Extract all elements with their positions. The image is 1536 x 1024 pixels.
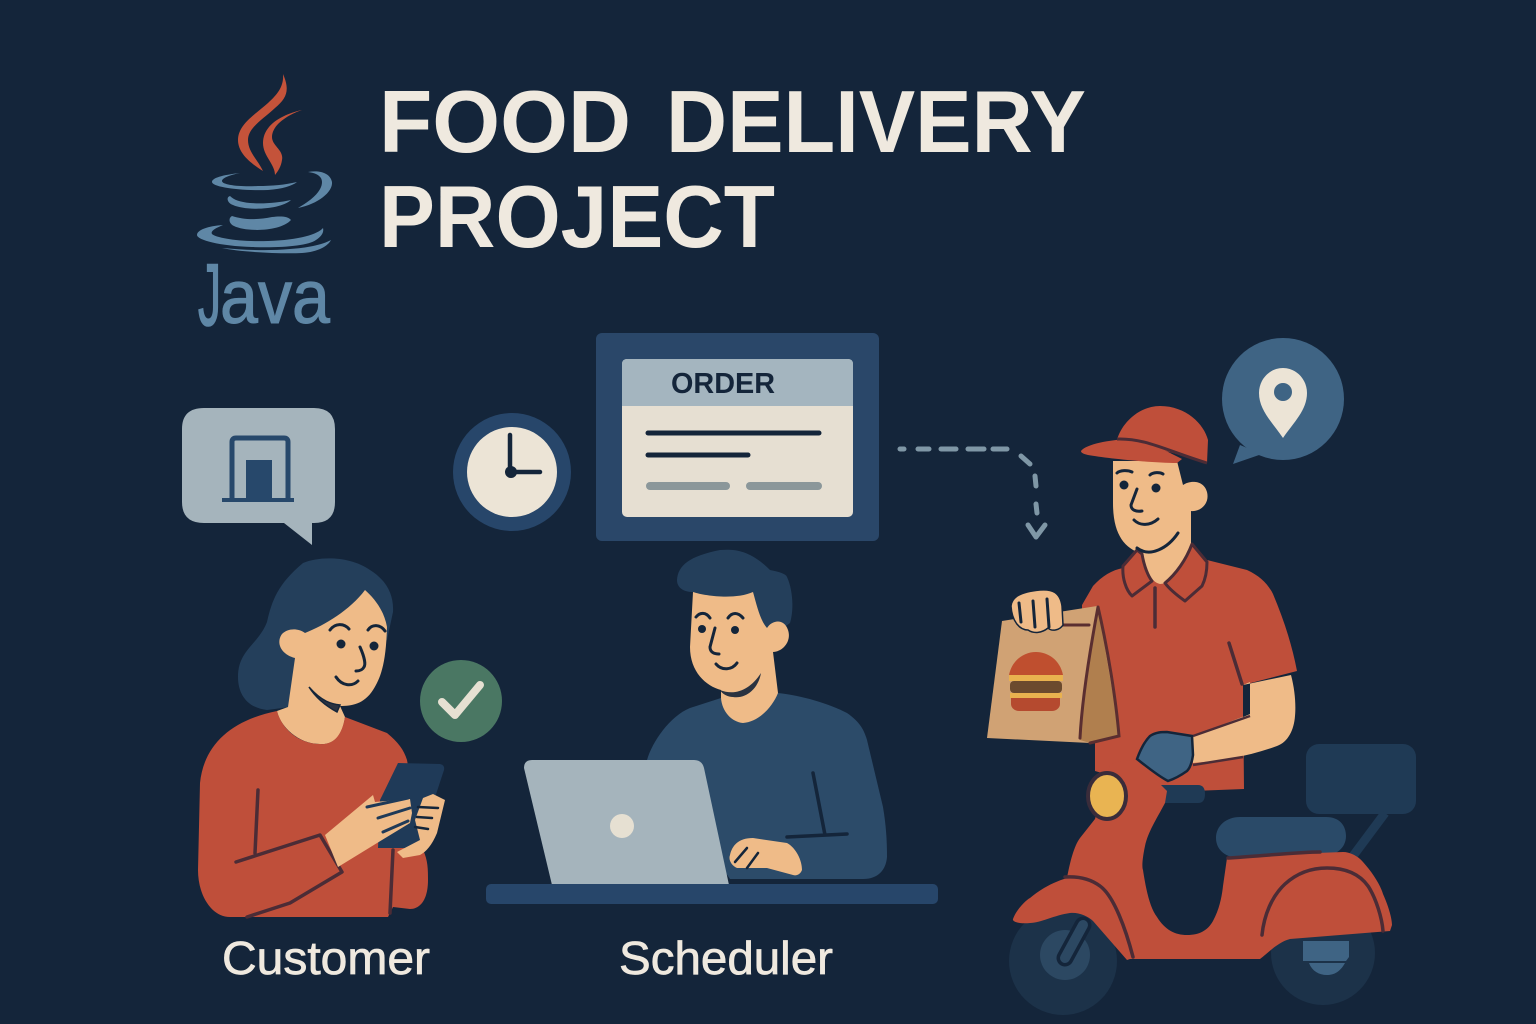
left hand (325, 795, 412, 867)
chin shadow (720, 673, 761, 697)
title: PROJECT (379, 167, 775, 266)
title: FOOD (379, 72, 631, 171)
hair (677, 550, 792, 640)
icon: green check (420, 660, 502, 742)
shirt (1082, 560, 1297, 792)
right hand (397, 794, 445, 858)
order text lines (648, 433, 819, 486)
neck and face (690, 592, 789, 723)
title (379, 72, 1086, 266)
panel: order card (596, 333, 879, 541)
face (330, 625, 385, 685)
handlebar (1160, 785, 1205, 803)
sweater lines (236, 790, 393, 917)
label: scheduler: Scheduler (619, 932, 833, 984)
holding hand (1011, 590, 1063, 632)
scooter rear box (1306, 744, 1416, 814)
neck and face (277, 590, 387, 744)
icon: Java logo: J (198, 245, 221, 344)
sleeve gap arm (1193, 675, 1295, 763)
desk (486, 884, 938, 904)
icon: location bubble (1222, 338, 1344, 464)
icon: Java logo (197, 74, 332, 344)
face (1117, 471, 1178, 552)
phone (378, 763, 444, 848)
scooter body (1013, 760, 1392, 960)
hand (729, 838, 802, 875)
paper bag (987, 606, 1120, 743)
icon: clock (453, 413, 571, 531)
sweater (198, 711, 428, 917)
laptop (524, 760, 729, 885)
arm lines (787, 773, 847, 837)
scooter wheels (1009, 907, 1117, 1015)
seat (1216, 817, 1346, 858)
figure: customer (198, 558, 445, 917)
icon: restaurant speech bubble (182, 408, 335, 545)
chin shadow (309, 687, 340, 712)
icon: burger (1009, 652, 1063, 711)
neck and head (1113, 461, 1208, 584)
figure: courier (987, 406, 1416, 1015)
headlight (1088, 773, 1126, 819)
icon: Java logo: ava (220, 255, 331, 340)
cap (1117, 406, 1208, 463)
collar (1123, 544, 1207, 601)
label: customer: Customer (222, 932, 430, 984)
title: DELIVERY (666, 72, 1086, 171)
torso (647, 693, 887, 879)
arrow: order to courier (900, 449, 1045, 537)
order heading: ORDER (671, 368, 775, 400)
hair (238, 558, 393, 710)
figure: scheduler (486, 550, 938, 904)
glove (1137, 732, 1193, 781)
face (696, 613, 743, 669)
